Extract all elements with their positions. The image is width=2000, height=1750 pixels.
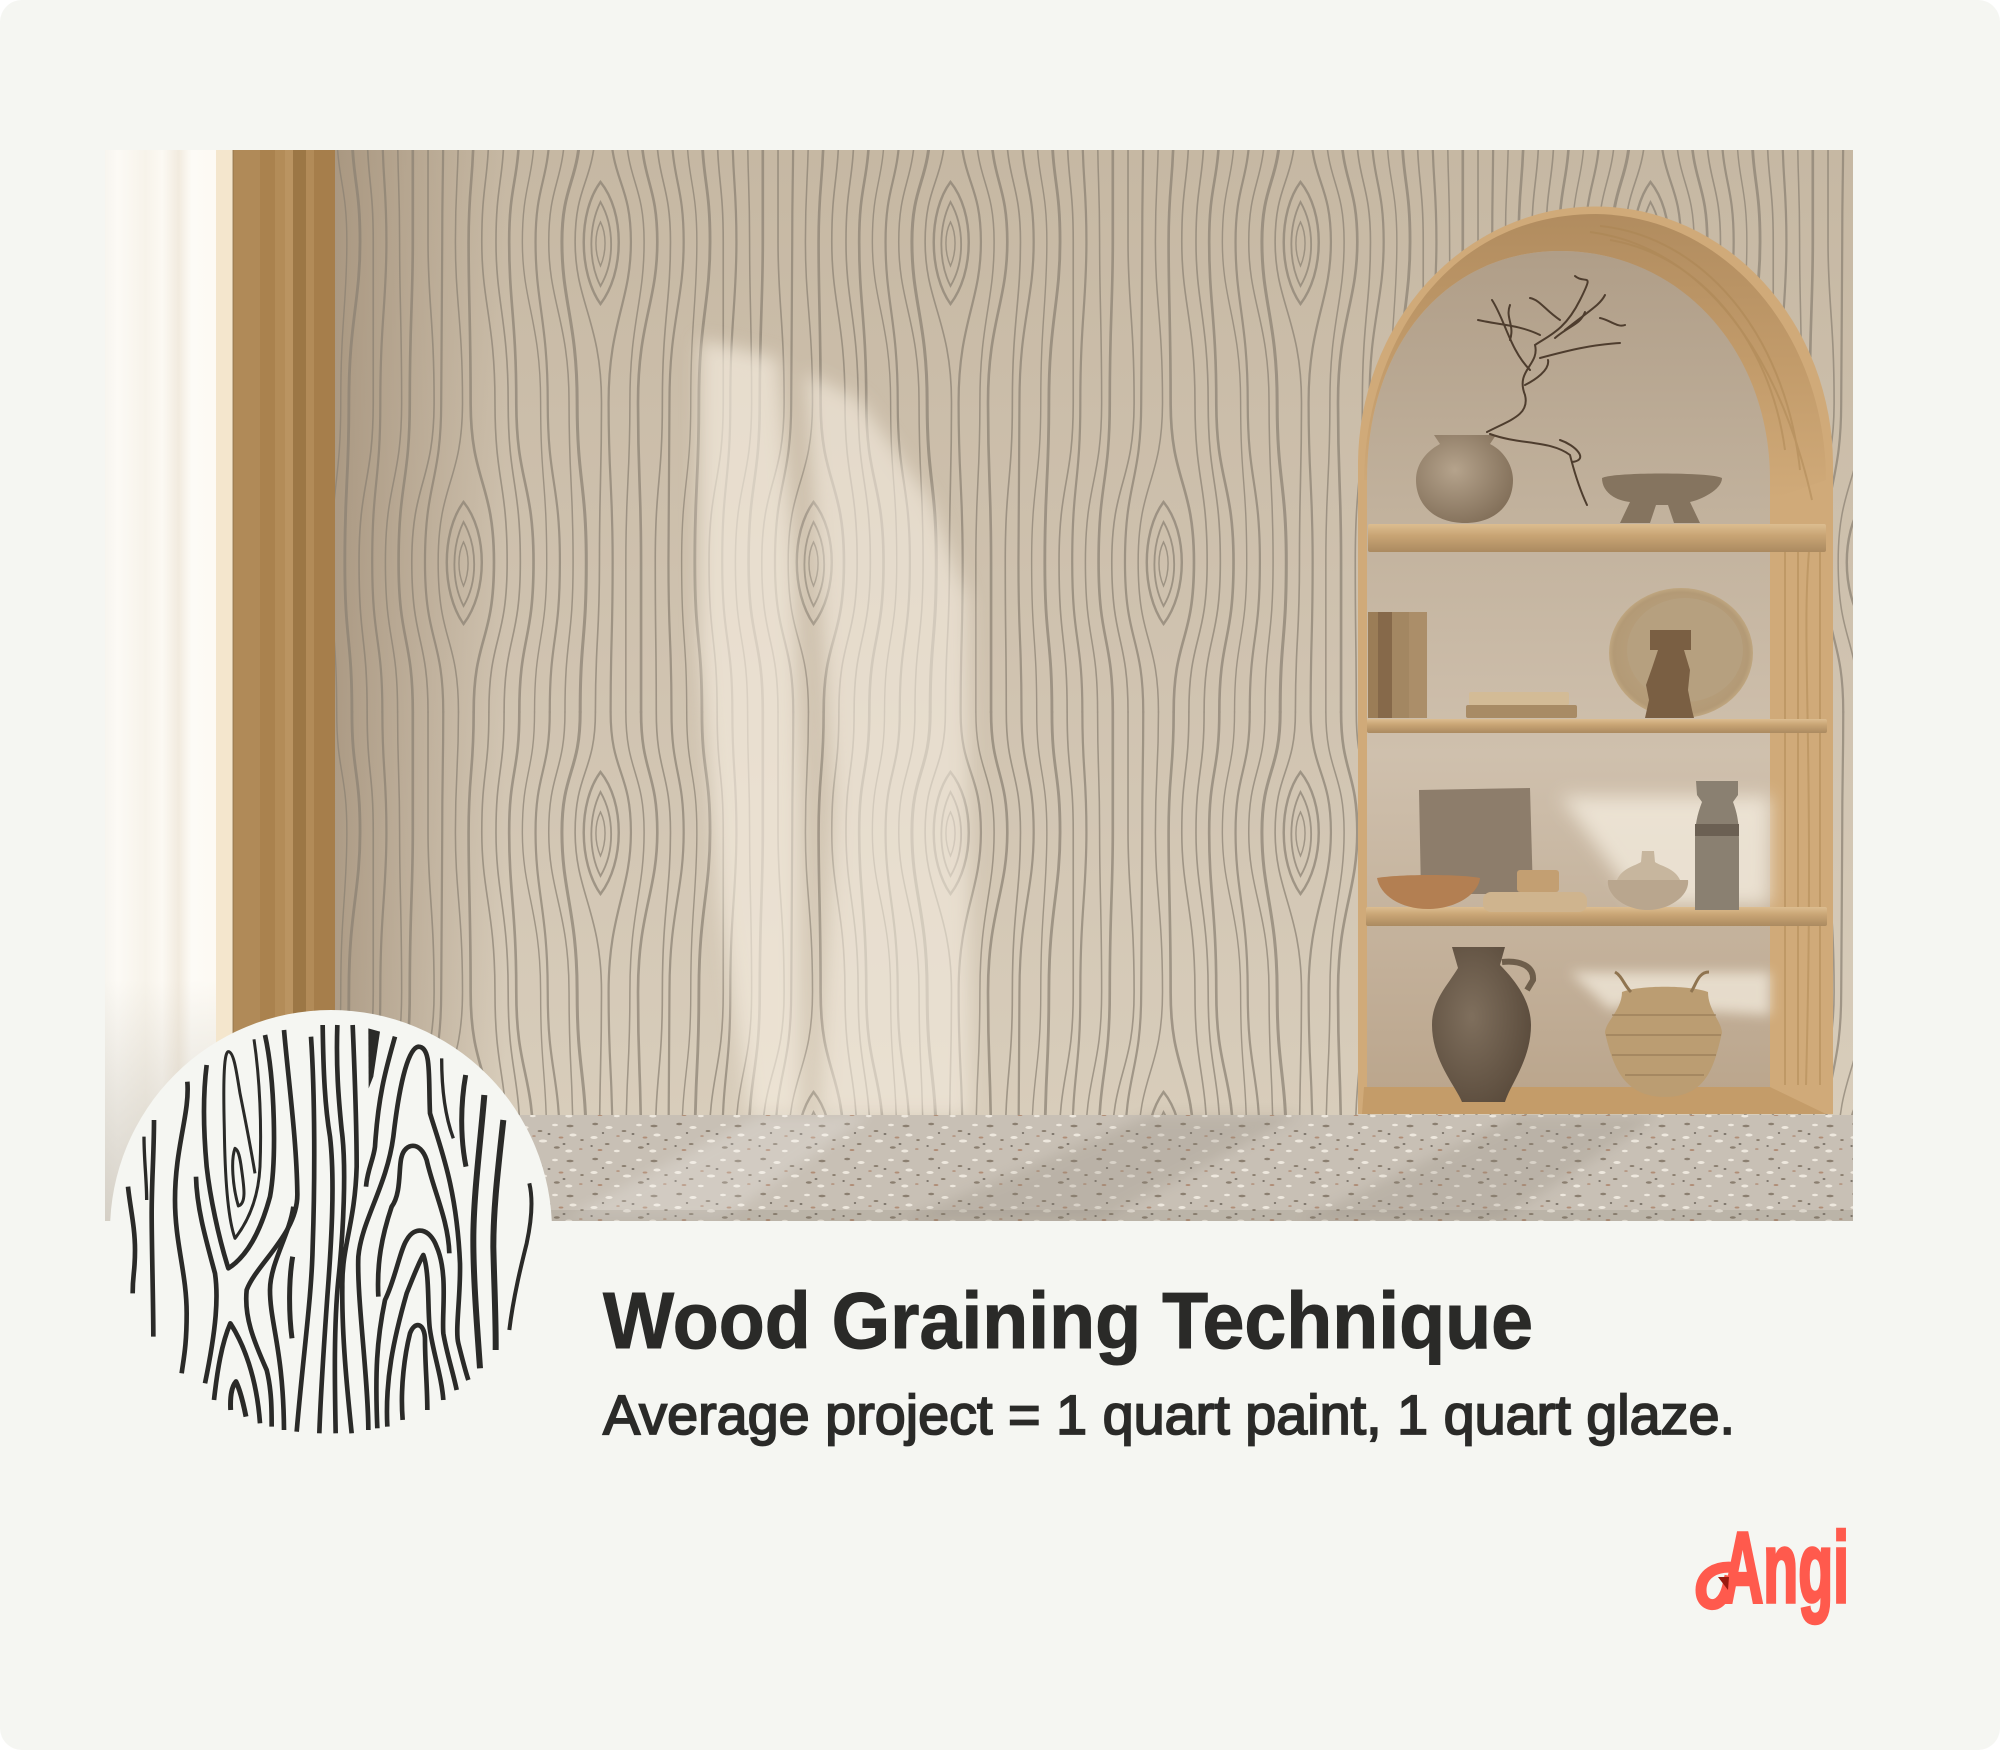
back wall [1367,251,1770,1090]
jamb wood grain [1785,540,1820,1085]
tan curtain with pleats [232,150,335,1034]
arch frame [1358,206,1833,1114]
second shelf objects: books, plate, figure [1368,588,1753,718]
Angi logo: Angi [1722,1512,1849,1624]
sunlight beams on wall [700,340,970,1116]
shelves [1362,524,1827,1114]
arched wooden niche [1358,206,1833,1114]
sunlight patches [1560,796,1770,905]
terrazzo floor [519,1114,1853,1221]
arch wood grain [1613,233,1813,500]
wall with wood grain paint [335,150,1853,1115]
bottom shelf objects: jug and woven basket [1432,947,1722,1102]
wood grain circle icon [110,1010,552,1452]
top shelf objects: vase, branch, footed bowl [1416,276,1722,523]
sheer white curtain [105,150,233,1221]
photo: room with wood grain wall [105,150,1853,1221]
Angi logo [1701,1512,1849,1624]
title: Wood Graining Technique [603,1276,1533,1365]
third shelf objects: tile, bowls, lidded pot, tall vase [1377,781,1739,912]
subtitle: Average project = 1 quart paint, 1 quart glaze. [603,1383,1735,1446]
